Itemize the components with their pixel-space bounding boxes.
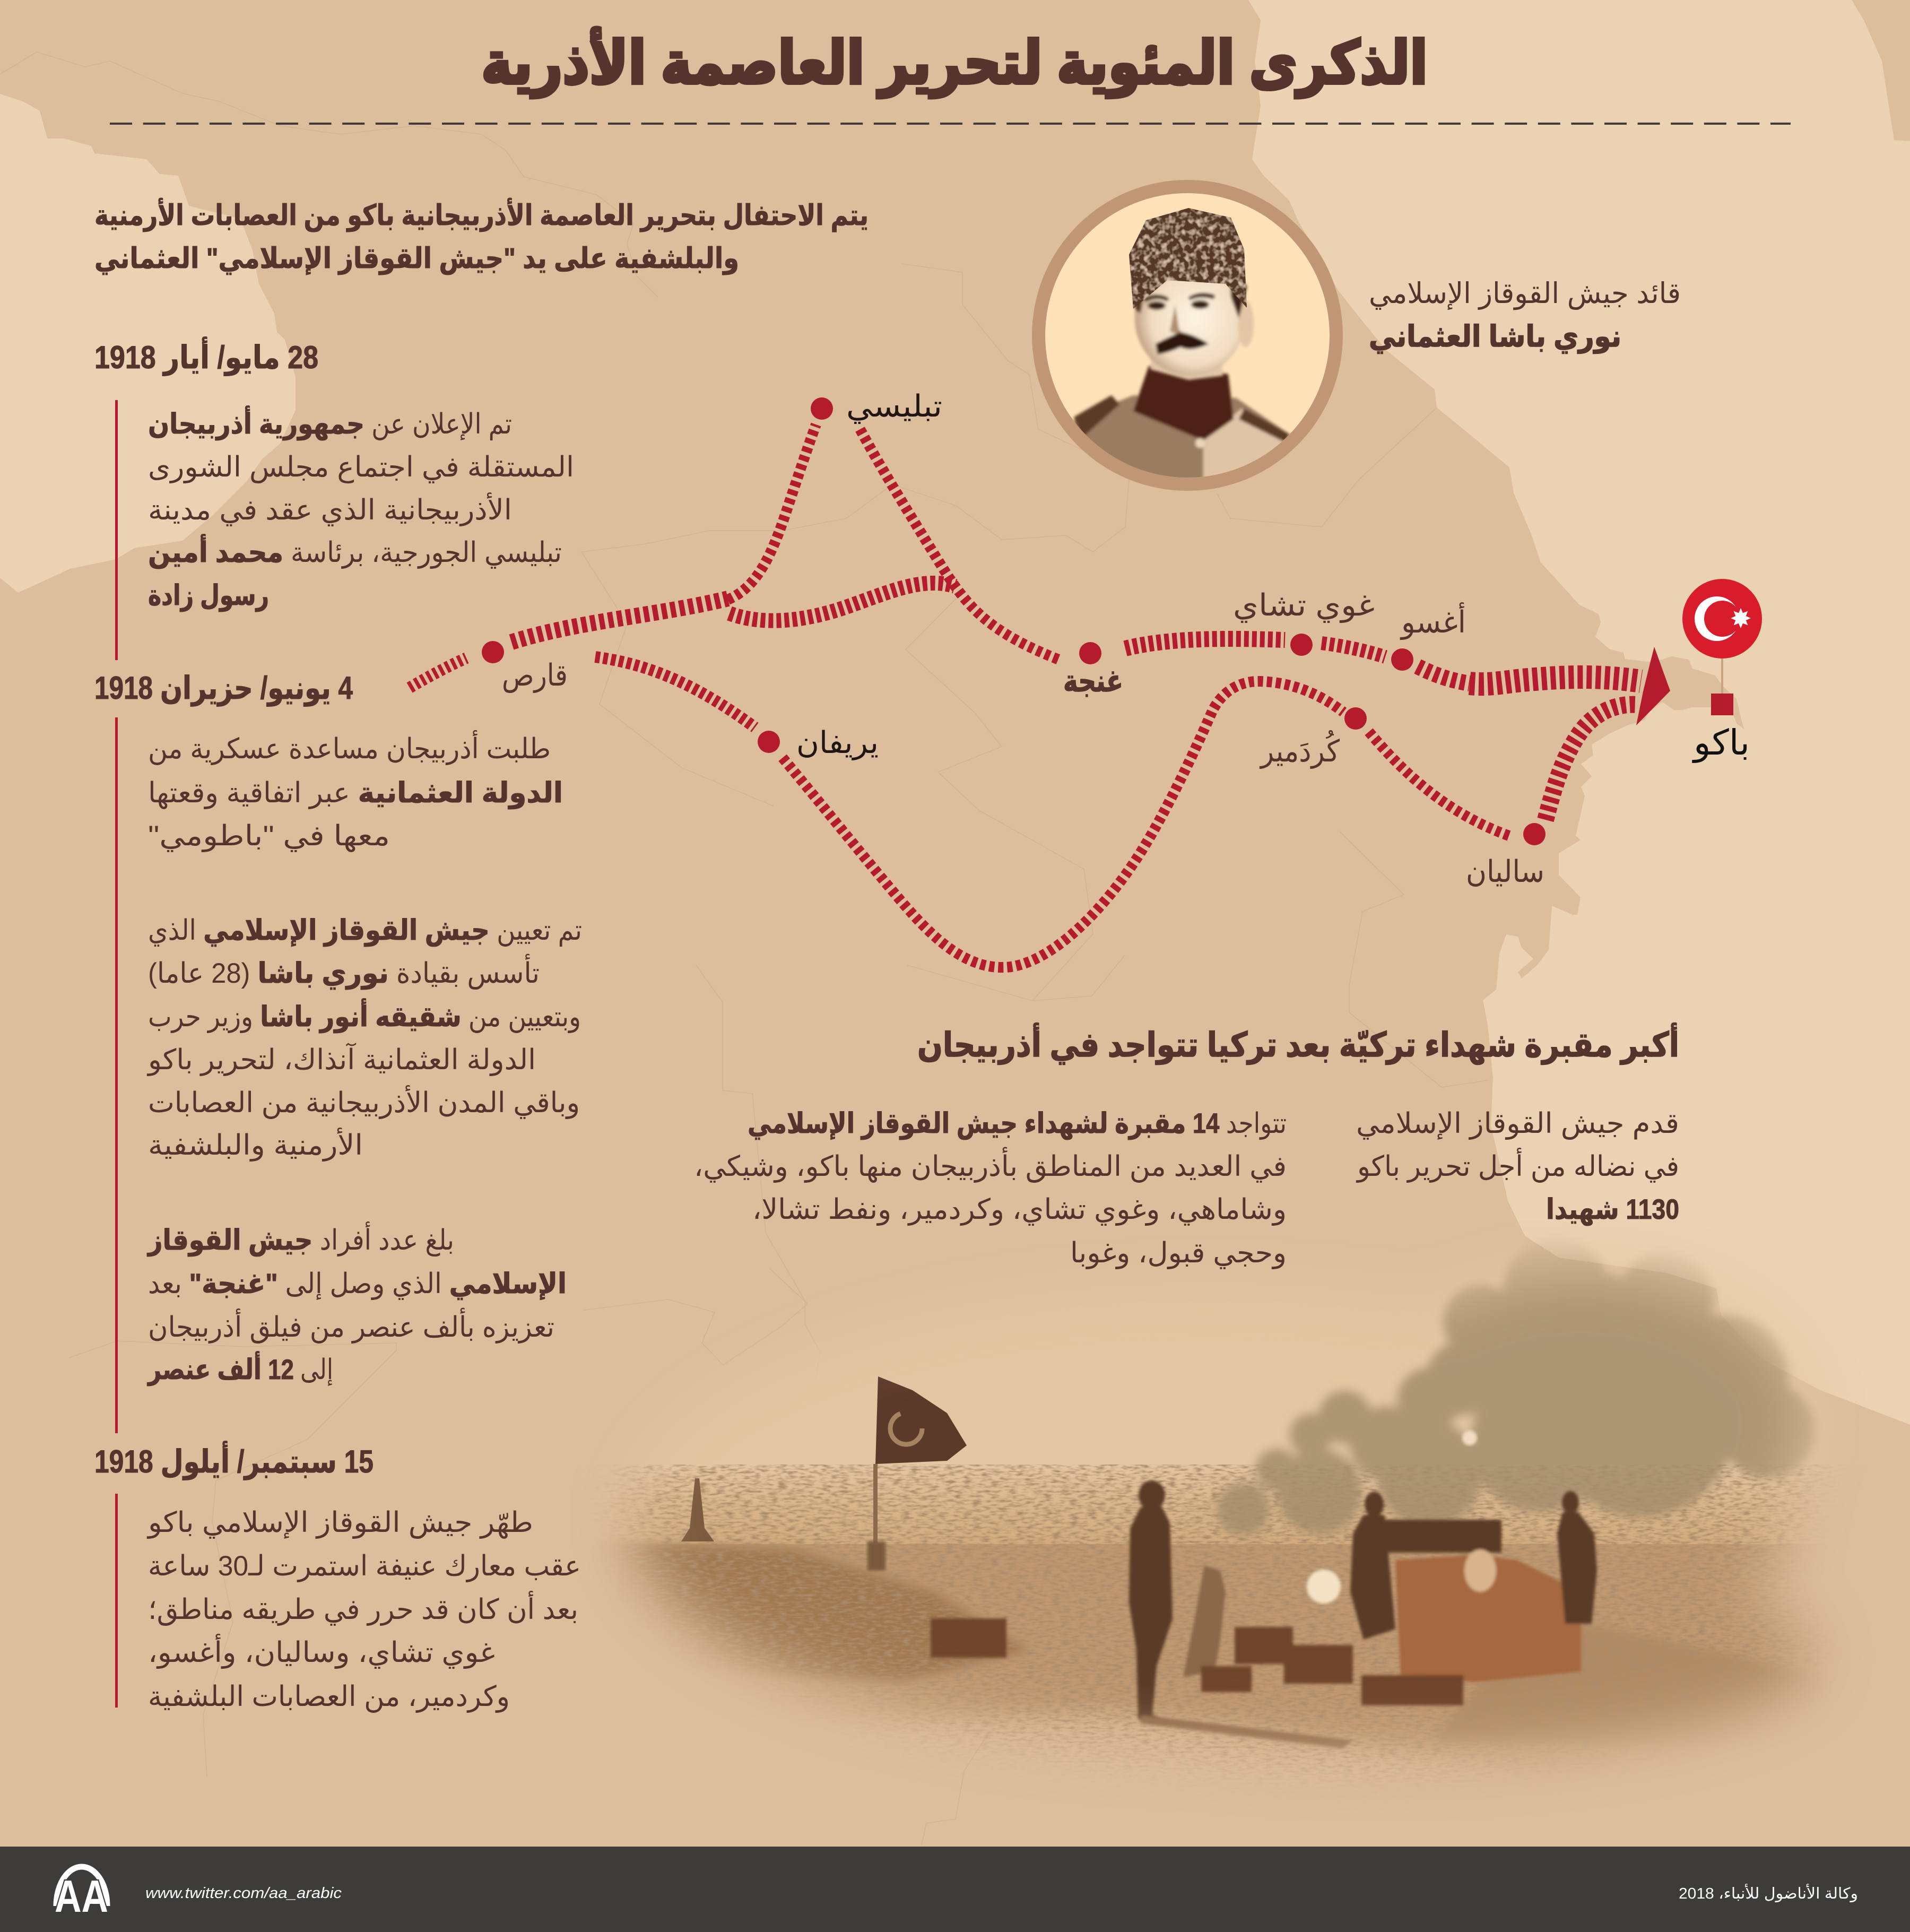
city labels: كُردَمير: [1259, 729, 1340, 769]
right column text: قدم جيش القوقاز الإسلامي: [1356, 1108, 1679, 1140]
description: army size: إلى 12 ألف عنصر: [147, 1351, 333, 1386]
description: army size: [146, 1221, 567, 1386]
description: Caucasus Islamic Army: وبتعيين من شقيقه أنور باشا وزير حرب: [148, 998, 581, 1033]
city labels: تبليسي: [846, 389, 942, 424]
battle photograph with soft edges: [604, 1241, 1831, 1784]
fur hat: [1129, 208, 1247, 309]
description: Caucasus Islamic Army: وباقي المدن الأذربيجانية من العصابات: [148, 1085, 580, 1119]
city labels: غوي تشاي: [1233, 588, 1375, 623]
description: غوي تشاي، وساليان، وأغسو،: [148, 1634, 495, 1669]
description: عقب معارك عنيفة استمرت لـ30 ساعة: [148, 1550, 581, 1582]
face: [1133, 261, 1254, 376]
icon: AA logo: AA: [55, 1872, 108, 1922]
description: Batumi agreement: طلبت أذربيجان مساعدة عسكرية من: [148, 730, 551, 765]
description: Caucasus Islamic Army: تأسس بقيادة نوري باشا (28 عاما): [148, 954, 540, 990]
description: رسول زادة: [148, 580, 269, 612]
route segments: [410, 424, 1641, 967]
flag pole: [873, 1464, 878, 1544]
land at top right corner: [1852, 0, 1910, 141]
timeline bar: [115, 1494, 118, 1708]
city labels: غنجة: [1063, 664, 1123, 698]
ammunition boxes: [931, 1618, 1463, 1748]
description: Caucasus Islamic Army: الدولة العثمانية آنذاك، لتحرير باكو: [146, 1043, 536, 1076]
arrow head: [1636, 647, 1670, 725]
left column text: وشاماهي، وغوي تشاي، وكردمير، ونفط تشالا،: [752, 1194, 1287, 1226]
monument: [681, 1478, 714, 1541]
left column text: في العديد من المناطق بأذربيجان منها باكو، وشيكي،: [694, 1147, 1287, 1183]
section heading: أكبر مقبرة شهداء تركيّة بعد تركيا تتواجد في أذربيجان: [917, 1023, 1679, 1065]
right column text: 1130 شهيدا: [1546, 1194, 1679, 1226]
campaign routes map: [410, 389, 1762, 967]
description: army size: الإسلامي الذي وصل إلى "غنجة" بعد: [148, 1268, 567, 1300]
description: طهّر جيش القوقاز الإسلامي باكو: [146, 1507, 533, 1539]
ground: [676, 1544, 1831, 1776]
gun crew and gun: [1307, 1491, 1597, 1682]
description: الأذربيجانية الذي عقد في مدينة: [148, 492, 512, 526]
timeline bar: [115, 400, 118, 660]
portrait caption: قائد جيش القوقاز الإسلامي: [1369, 278, 1681, 310]
description: Caucasus Islamic Army: [146, 915, 582, 1162]
right column text: في نضاله من أجل تحرير باكو: [1356, 1148, 1679, 1183]
dashed divider under the title: [110, 123, 1791, 125]
city labels: [502, 389, 1544, 889]
martyrs cemetery section: [694, 1023, 1679, 1269]
footer bar: [0, 1847, 1910, 1932]
date heading: 28 مايو/ أيار 1918: [94, 336, 318, 376]
twitter address: www.twitter.com/aa_arabic: [145, 1885, 342, 1902]
title: الذكرى المئوية لتحرير العاصمة الأذرية: [481, 27, 1428, 98]
soldier standing: [1129, 1480, 1173, 1725]
crouching soldier: [1183, 1565, 1226, 1677]
city labels: يريفان: [796, 726, 879, 760]
description: المستقلة في اجتماع مجلس الشورى: [148, 452, 574, 483]
icon: flag roundel: [1682, 579, 1762, 659]
date heading: 15 سبتمبر/ أيلول 1918: [94, 1441, 374, 1480]
description: army size: تعزيزه بألف عنصر من فيلق أذربيجان: [148, 1307, 554, 1344]
description: تبليسي الجورجية، برئاسة محمد أمين: [148, 534, 562, 569]
description: بعد أن كان قد حرر في طريقه مناطق؛: [148, 1591, 578, 1626]
left column text: وحجي قبول، وغوبا: [1070, 1237, 1287, 1269]
description: تم الإعلان عن جمهورية أذربيجان: [148, 405, 512, 440]
sky: [719, 1302, 1729, 1465]
intro text: [94, 198, 869, 275]
timeline: 15 September 1918: [94, 1441, 581, 1713]
date heading: 4 يونيو/ حزيران 1918: [94, 670, 353, 707]
description: Batumi agreement: الدولة العثمانية عبر اتفاقية وقعتها: [148, 777, 563, 809]
copyright: وكالة الأناضول للأنباء، 2018: [1679, 1883, 1858, 1902]
portrait of Nuri Pasha: [1032, 180, 1343, 499]
description: army size: بلغ عدد أفراد جيش القوقاز: [146, 1221, 454, 1257]
intro text: والبلشفية على يد "جيش القوقاز الإسلامي" العثماني: [94, 242, 739, 275]
timeline: 28 May 1918: [94, 336, 574, 660]
right column text: [1356, 1108, 1679, 1226]
portrait caption: نوري باشا العثماني: [1369, 319, 1621, 354]
smoke: [1217, 1237, 1816, 1536]
city labels: أغسو: [1400, 602, 1466, 640]
description: [146, 1507, 581, 1713]
uniform: [1056, 366, 1332, 499]
Baku marker: باكو: [1692, 723, 1750, 763]
description: وكردمير، من العصابات البلشفية: [148, 1681, 510, 1713]
description: [148, 405, 574, 612]
city labels: قارص: [502, 659, 568, 693]
description: Caucasus Islamic Army: الأرمنية والبلشفية: [148, 1128, 363, 1162]
horizon band: [607, 1465, 1827, 1544]
city labels: ساليان: [1466, 855, 1544, 889]
flag: [875, 1376, 967, 1464]
description: Caucasus Islamic Army: تم تعيين جيش القوقاز الإسلامي الذي: [148, 915, 582, 947]
timeline bar: [115, 717, 118, 1433]
portrait caption: [1369, 278, 1681, 354]
neck: [1150, 350, 1223, 380]
Baku marker: [1682, 579, 1762, 763]
intro text: يتم الاحتفال بتحرير العاصمة الأذربيجانية باكو من العصابات الأرمنية: [94, 198, 869, 232]
city dots: [482, 397, 1546, 845]
timeline: 4 June 1918: [94, 670, 582, 1433]
left column text: تتواجد 14 مقبرة لشهداء جيش القوقاز الإسلامي: [748, 1108, 1287, 1140]
left column text: [694, 1108, 1287, 1269]
description: Batumi agreement: [148, 730, 563, 852]
description: Batumi agreement: معها في "باطومي": [148, 820, 390, 852]
